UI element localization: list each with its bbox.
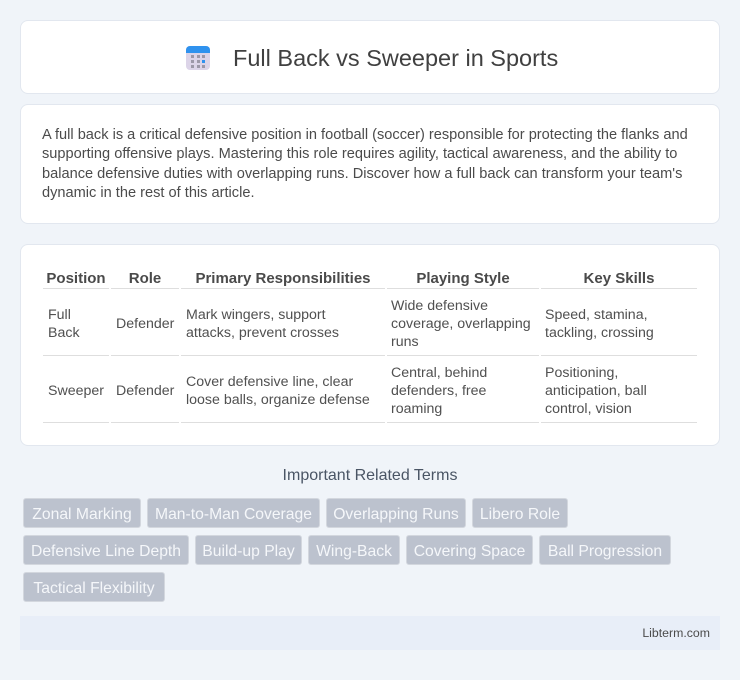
column headers: Playing Style — [416, 270, 510, 287]
table: attacks, prevent crosses — [186, 325, 339, 341]
table: coverage, overlapping — [391, 316, 531, 332]
title: Full Back vs Sweeper in Sports — [233, 45, 558, 71]
table: control, vision — [545, 401, 632, 417]
intro paragraph — [42, 127, 688, 201]
table: Defender — [116, 383, 174, 399]
related term tags: Zonal Marking — [32, 506, 132, 523]
table: Sweeper — [48, 383, 104, 399]
related term tags: Ball Progression — [548, 543, 662, 560]
table: Positioning, — [545, 365, 618, 381]
related term tags: Covering Space — [414, 543, 525, 560]
table: runs — [391, 334, 419, 350]
table — [43, 270, 697, 423]
intro paragraph: dynamic in the rest of this article. — [42, 185, 255, 201]
table: anticipation, ball — [545, 383, 647, 399]
column headers: Position — [46, 270, 106, 287]
comparison table panel — [20, 244, 720, 446]
intro paragraph: balance defensive duties with overlapping runs. Discover how a full back can transform your team's — [42, 166, 682, 182]
intro paragraph: A full back is a critical defensive position in football (soccer) responsible for protecting the flanks and — [42, 127, 688, 143]
related term tags: Overlapping Runs — [333, 506, 459, 523]
table: Mark wingers, support — [186, 307, 326, 323]
table: Back — [48, 325, 80, 341]
related term tags: Wing-Back — [316, 543, 392, 560]
related terms heading: Important Related Terms — [283, 467, 457, 484]
column headers: Primary Responsibilities — [195, 270, 371, 287]
header panel — [20, 20, 720, 94]
related term tags: Tactical Flexibility — [33, 580, 155, 597]
icon: calendar — [186, 46, 210, 70]
related term tags: Man-to-Man Coverage — [155, 506, 312, 523]
column headers: Role — [129, 270, 161, 287]
table: defenders, free — [391, 383, 486, 399]
intro paragraph: supporting offensive plays. Mastering this role requires agility, tactical awareness, and the ability to — [42, 146, 677, 162]
table: Wide defensive — [391, 298, 488, 314]
related term tags — [23, 498, 671, 602]
table: tackling, crossing — [545, 325, 654, 341]
table: Cover defensive line, clear — [186, 374, 353, 390]
footer bar — [20, 616, 720, 650]
related term tags: Libero Role — [480, 506, 560, 523]
table: Central, behind — [391, 365, 487, 381]
table: loose balls, organize defense — [186, 392, 370, 408]
column headers: Key Skills — [584, 270, 654, 287]
related term tags: Defensive Line Depth — [31, 543, 181, 560]
table: Defender — [116, 316, 174, 332]
footer source: Libterm.com — [642, 626, 710, 640]
related term tags: Build-up Play — [202, 543, 295, 560]
column headers — [43, 270, 697, 423]
table: Speed, stamina, — [545, 307, 648, 323]
table: Full — [48, 307, 71, 323]
table: roaming — [391, 401, 442, 417]
intro text panel — [20, 104, 720, 224]
